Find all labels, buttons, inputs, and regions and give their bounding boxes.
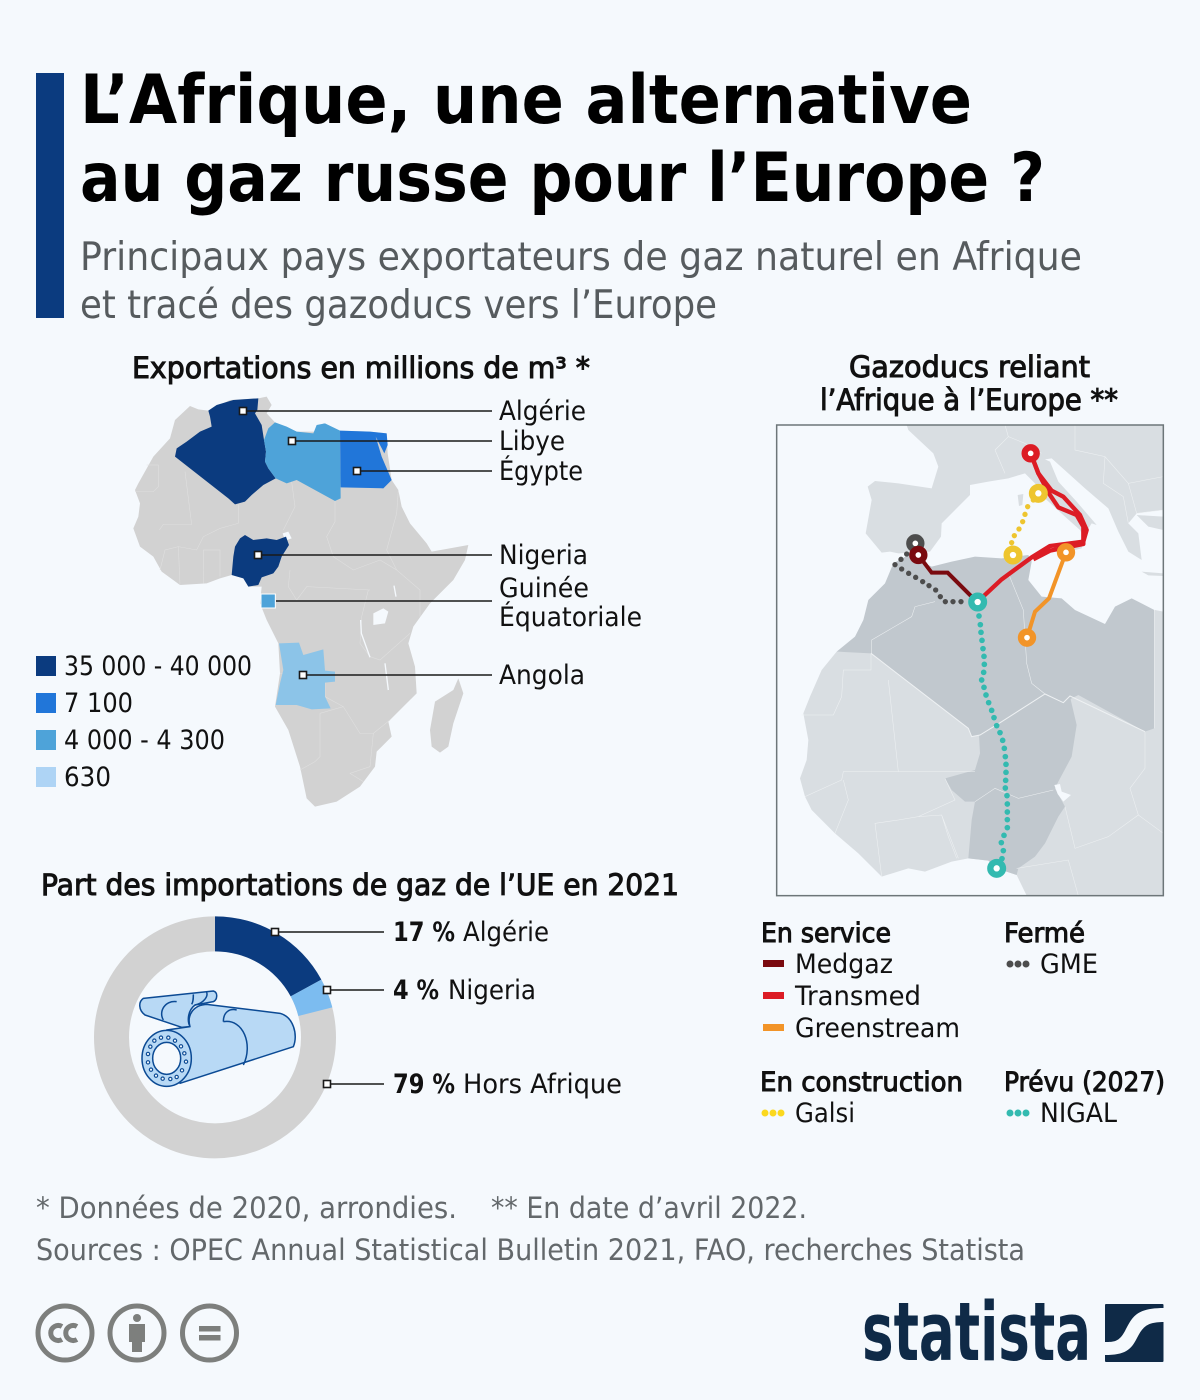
land: Europe [866, 425, 1163, 560]
title: au gaz russe pour l’Europe ? [80, 139, 1045, 218]
donut labels: Algérie [463, 917, 549, 948]
donut labels: Hors Afrique [463, 1069, 622, 1100]
legend group: En construction: Galsi [795, 1098, 855, 1129]
title accent bar [36, 73, 64, 318]
pipeline: NIGAL (planned) [976, 613, 1010, 861]
legend: export ranges: 35 000 - 40 000 [64, 651, 252, 682]
country labels: Équatoriale [499, 601, 642, 633]
land: Madagascar [430, 678, 463, 753]
footnotes and sources: * Données de 2020, arrondies. [36, 1191, 457, 1225]
legend group: Prévu (2027): NIGAL [1040, 1098, 1117, 1129]
land: West and Central Africa [800, 610, 1163, 896]
legend group: En service: Greenstream [795, 1013, 960, 1044]
legend group: Fermé [1004, 918, 1098, 980]
land: Morocco, Algeria, Tunisia, Libya [837, 555, 1154, 737]
donut labels: Nigeria [448, 975, 536, 1006]
legend group: Prévu (2027): Prévu (2027) [1004, 1067, 1165, 1098]
country labels: Libye [499, 426, 565, 457]
footnotes and sources: ** En date d’avril 2022. [491, 1191, 807, 1225]
legend group: En service: Medgaz [795, 949, 893, 980]
land: Africa [133, 397, 468, 807]
panel: Africa exports map [133, 396, 642, 807]
legend group: Fermé: GME [1040, 949, 1098, 980]
pipeline end rings [909, 447, 1072, 875]
country: Nigeria [232, 535, 289, 587]
country labels: Angola [499, 660, 585, 691]
subtitle: et tracé des gazoducs vers l’Europe [80, 283, 717, 328]
subtitle: Principaux pays exportateurs de gaz naturel en Afrique [80, 235, 1082, 280]
subtitle [80, 235, 1082, 328]
country: Angola [276, 643, 335, 709]
heading: EU imports: Part des importations de gaz de l’UE en 2021 [41, 868, 679, 902]
icon: gas pipe [140, 991, 295, 1086]
legend: export ranges: 4 000 - 4 300 [64, 725, 225, 756]
footnotes and sources: Sources : OPEC Annual Statistical Bulletin 2021, FAO, recherches Statista [36, 1233, 1025, 1267]
country labels: Algérie [499, 396, 586, 427]
leader: Guinée Équatoriale [276, 600, 492, 602]
title: L’Afrique, une alternative [80, 61, 972, 140]
leader: Angola [300, 672, 492, 678]
panel: pipelines map [777, 425, 1163, 896]
segment: Nigeria 4 % [291, 980, 332, 1016]
legend group: En service [761, 918, 960, 1044]
pipeline: GME (closed) [892, 551, 964, 604]
donut labels: 4 % [393, 975, 439, 1006]
donut labels: 17 % [393, 917, 455, 948]
legend: export ranges [36, 651, 252, 793]
footnotes and sources [36, 1191, 1025, 1267]
country: Libye [264, 422, 341, 501]
land: Niger and Nigeria [945, 694, 1077, 875]
legend: export ranges: 630 [64, 762, 111, 793]
country labels [499, 396, 642, 691]
legend group: Prévu (2027) [1004, 1067, 1165, 1129]
legend group: En service: En service [761, 918, 891, 949]
country labels: Guinée [499, 573, 589, 604]
leader: Nigeria [254, 552, 492, 558]
segment: Algérie 17 % [215, 916, 321, 996]
title [80, 61, 1045, 218]
leader: 17 % Algérie [272, 928, 384, 936]
pipeline: Greenstream [1028, 560, 1065, 630]
country: Égypte [340, 431, 392, 488]
country labels: Égypte [499, 455, 583, 487]
chart: EU gas imports donut [111, 916, 332, 1141]
pipeline: Galsi (under construction) [1009, 497, 1036, 545]
pipeline: Transmed [978, 453, 1087, 602]
legend: export ranges: 7 100 [64, 688, 133, 719]
heading: pipelines: Gazoducs reliant [849, 350, 1090, 384]
leader: Algérie [240, 408, 492, 414]
map: Africa countries [133, 397, 468, 807]
heading: pipelines [820, 350, 1118, 417]
icon: Creative Commons badges [38, 1306, 236, 1360]
legend group: En service: Transmed [794, 981, 921, 1012]
leader: Égypte [354, 468, 492, 474]
donut labels: 79 % [393, 1069, 455, 1100]
legend group: Fermé: Fermé [1004, 918, 1085, 949]
country: Guinée Équatoriale [261, 594, 275, 608]
heading: exports: Exportations en millions de m³ * [132, 351, 590, 385]
leader: Libye [288, 438, 492, 444]
legend group: En construction [760, 1067, 963, 1129]
country: Algérie [175, 398, 276, 504]
donut labels [393, 917, 622, 1100]
country labels: Nigeria [499, 540, 588, 571]
heading: pipelines: l’Afrique à l’Europe ** [820, 383, 1118, 417]
legend group: En construction: En construction [760, 1067, 963, 1098]
pipeline: Medgaz [922, 560, 972, 598]
leader: 4 % Nigeria [324, 986, 384, 994]
legend: pipeline status [760, 918, 1165, 1129]
segment: hors Afrique 79 % [111, 934, 318, 1141]
leader: 79 % Hors Afrique [324, 1080, 384, 1088]
